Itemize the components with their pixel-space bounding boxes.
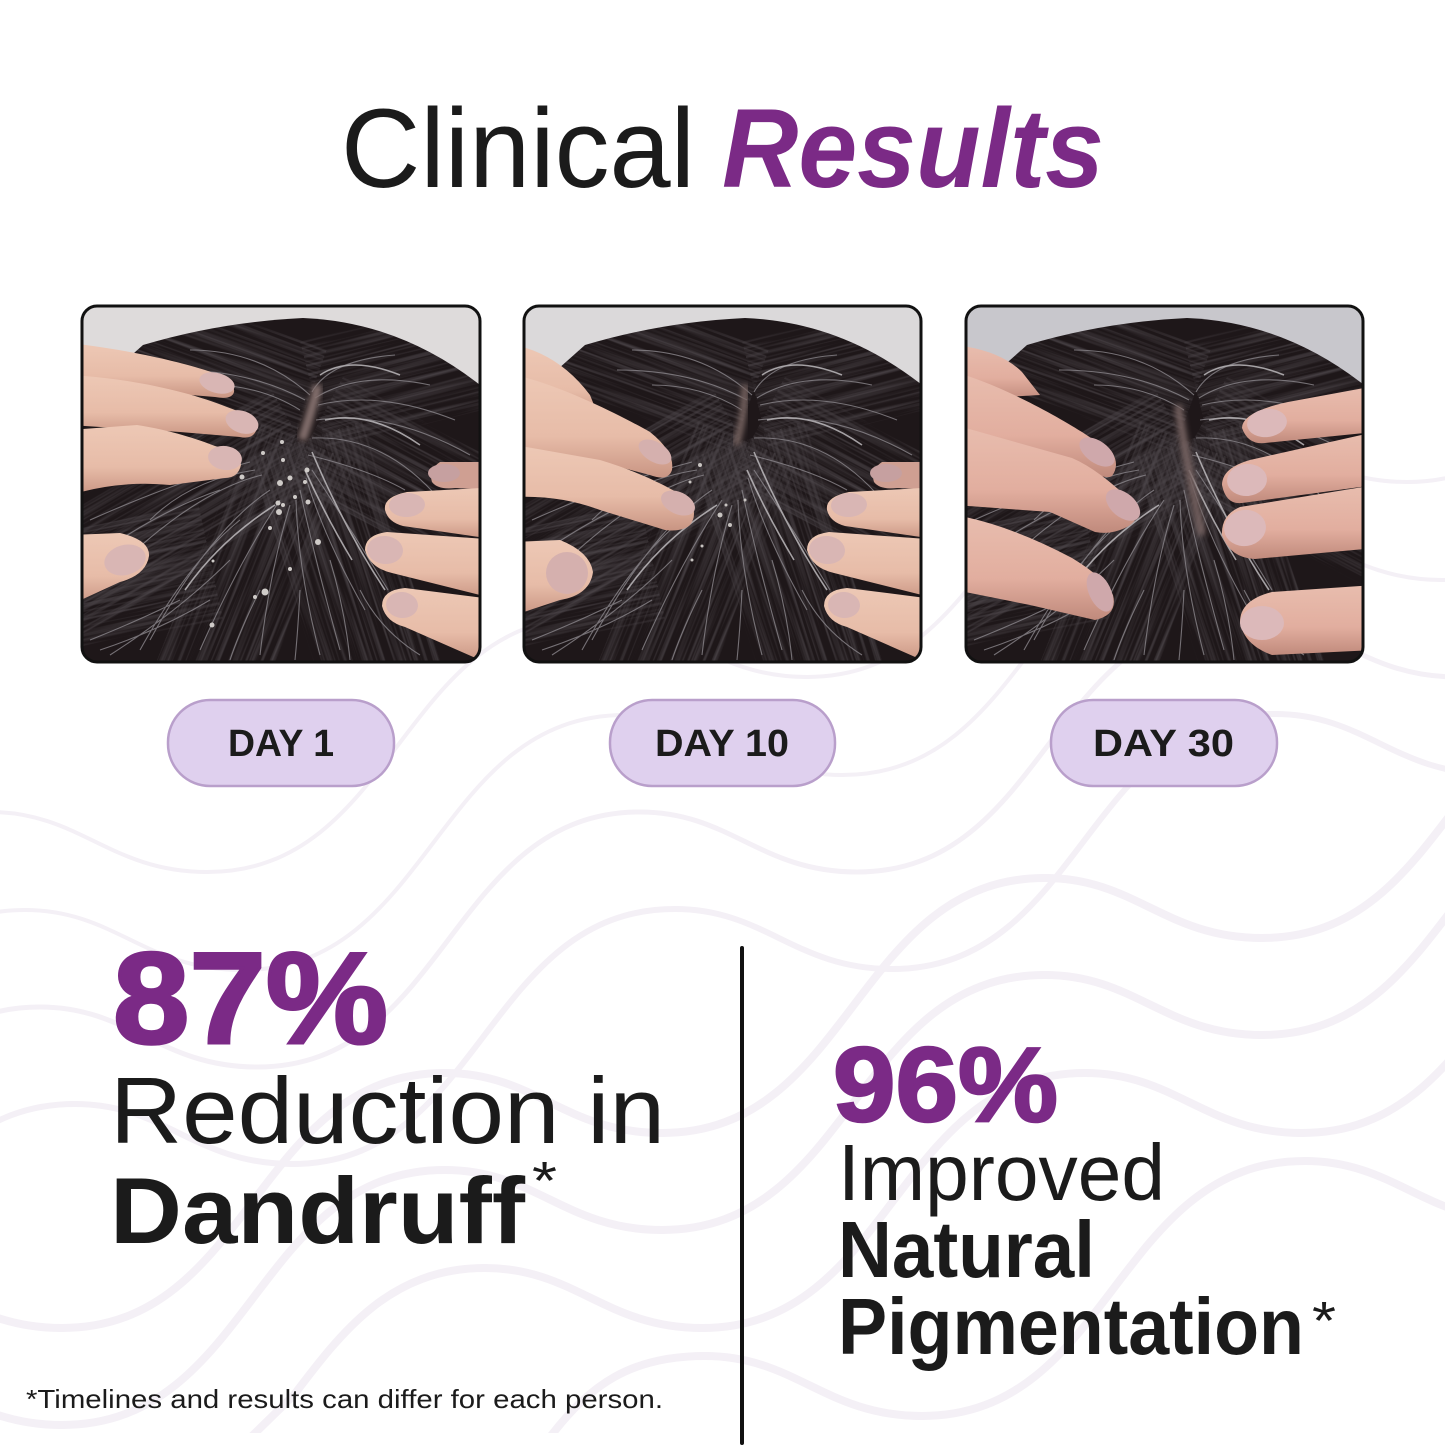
stat: 87% reduction in dandruff: Dandruff <box>110 1158 526 1263</box>
stat: 96% improved natural pigmentation <box>833 1026 1336 1371</box>
right hand fingers <box>807 462 920 657</box>
pill: day 10: DAY 10 <box>655 723 789 765</box>
left hand fingers <box>84 344 258 599</box>
right hand fingers <box>1222 386 1375 655</box>
right hand fingers <box>365 462 478 658</box>
title <box>341 86 1104 211</box>
dandruff flakes <box>210 440 321 628</box>
stat: 96% improved natural pigmentation: Pigmentation <box>838 1282 1304 1371</box>
stat: 87% reduction in dandruff: Reduction in <box>110 1058 665 1163</box>
dandruff flakes <box>688 463 746 562</box>
divider <box>740 946 744 1445</box>
stat: 87% reduction in dandruff <box>110 925 665 1263</box>
pill: day 30 <box>1051 700 1277 786</box>
left hand fingers <box>968 347 1140 620</box>
stat: 96% improved natural pigmentation: Natural <box>838 1205 1095 1294</box>
stat: 87% reduction in dandruff: 87% <box>113 925 388 1071</box>
pill: day 1 <box>168 700 394 786</box>
pill: day 30: DAY 30 <box>1093 723 1234 765</box>
title: Results <box>722 86 1104 211</box>
stat: 96% improved natural pigmentation: * <box>1312 1291 1336 1351</box>
panel: photo day 10 <box>522 304 922 664</box>
left hand fingers <box>515 345 699 615</box>
stat: 87% reduction in dandruff: * <box>532 1151 557 1211</box>
footnote: *Timelines and results can differ for each person. <box>26 1384 663 1414</box>
stat: 96% improved natural pigmentation: 96% <box>833 1026 1058 1144</box>
title: Clinical <box>341 86 695 211</box>
stat: 96% improved natural pigmentation: Improved <box>838 1128 1165 1217</box>
panel: photo day 1 <box>80 304 482 664</box>
pill: day 10 <box>610 700 835 786</box>
panel: photo day 30 <box>964 304 1364 664</box>
pill: day 1: DAY 1 <box>228 723 334 765</box>
